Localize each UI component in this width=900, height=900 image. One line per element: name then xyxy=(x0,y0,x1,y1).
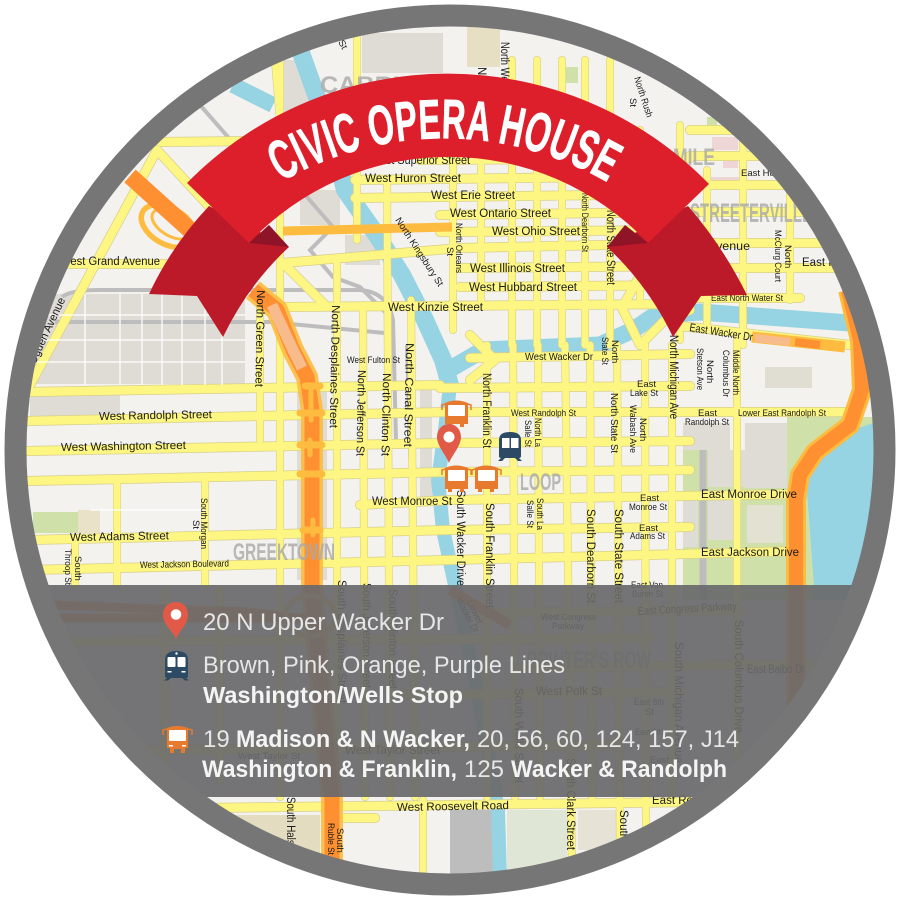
map: street labels: South xyxy=(334,828,345,853)
address line: 20 N Upper Wacker Dr xyxy=(203,609,444,636)
map: street labels: South Wells Street xyxy=(512,688,524,784)
map: street labels: West Randolph St xyxy=(511,408,576,419)
map: street labels: East Balbo Dr xyxy=(747,664,805,676)
map: street labels: St xyxy=(335,38,349,52)
map: street labels: North Jefferson St xyxy=(353,370,367,457)
map: street labels: West Huron Street xyxy=(365,173,462,185)
map: street labels: State St xyxy=(599,337,610,365)
map: street labels: North State Street xyxy=(604,210,616,286)
map: street labels: Adams St xyxy=(630,531,665,542)
map: street labels: East xyxy=(698,408,717,419)
map: street labels: North State St xyxy=(608,393,620,453)
map: street labels: West Congress xyxy=(541,612,596,623)
map: street labels: East Congress Parkway xyxy=(638,601,737,618)
map: street labels: West Randolph Street xyxy=(99,409,213,423)
icon: bus xyxy=(163,726,192,753)
banner: left tail xyxy=(149,206,289,337)
map: street labels: Parkway xyxy=(552,621,584,632)
map: street labels: Lower xyxy=(463,598,485,626)
map: street labels: St xyxy=(627,98,638,107)
map marker: bus stop north xyxy=(442,400,471,427)
map marker: train station xyxy=(498,432,522,461)
bus routes line two: Washington & Franklin, xyxy=(202,756,457,783)
map: street labels: West Ohio Street xyxy=(492,226,581,238)
map: neighborhood names: LOOP xyxy=(520,469,561,496)
map: street labels: North Wells St xyxy=(498,42,510,103)
map: street labels: South Desplaines Street xyxy=(335,580,347,704)
map: river xyxy=(233,50,880,880)
train stop text: Washington/Wells Stop xyxy=(203,682,463,708)
map: street labels: West Superior Street xyxy=(370,155,471,167)
banner: title xyxy=(281,138,612,185)
map: street labels: South xyxy=(72,556,83,581)
map: street labels: North Green Street xyxy=(252,290,266,388)
map: rail lines xyxy=(55,105,703,600)
map: street labels: East xyxy=(640,493,659,504)
map: street labels: West Wacker Dr xyxy=(525,351,593,363)
banner: right fold xyxy=(607,225,648,247)
info panel background xyxy=(48,585,852,797)
map: street labels: West Jackson Boulevard xyxy=(140,558,229,571)
banner: CIVIC OPERA HOUSE xyxy=(268,99,624,182)
train lines text: Brown, Pink, Orange, Purple Lines xyxy=(203,652,565,679)
map: gray building blocks xyxy=(30,33,443,580)
map marker: bus stop southeast xyxy=(472,466,501,492)
map: street labels: Randolph St xyxy=(685,417,729,428)
map: street labels: East Jackson Drive xyxy=(701,547,799,559)
map: expressways xyxy=(50,176,862,870)
map: street labels: Salle St xyxy=(522,420,533,447)
map: street labels: North Franklin St xyxy=(480,373,492,449)
map: street labels: East North Water St xyxy=(711,293,783,304)
map: street labels: Salle St xyxy=(524,500,535,528)
bus routes line one: Madison & N Wacker, xyxy=(236,726,470,753)
map: street labels: South Wacker Drive xyxy=(454,490,466,586)
map: street labels: South Clinton Street xyxy=(386,589,398,690)
map: street labels: North Clinton St xyxy=(379,373,392,457)
map: street labels: East Illinois xyxy=(802,257,860,269)
map: street labels: North Michigan Ave xyxy=(667,335,679,419)
map: street labels: Columbus Dr xyxy=(720,350,731,397)
bus routes line one: 19 xyxy=(203,726,230,753)
map: street labels: Throop St xyxy=(62,549,73,585)
map: street labels: North Rush xyxy=(631,76,655,119)
map: street labels: North Kingsbury St xyxy=(392,216,445,289)
map: street labels: South xyxy=(617,810,629,840)
map: neighborhood names: CABRINI xyxy=(320,72,425,99)
map: street labels: West Polk St xyxy=(536,686,603,698)
map: street labels: East Roosevelt Road xyxy=(652,795,760,807)
map: street labels: West Grand Avenue xyxy=(60,256,160,268)
icon: location pin xyxy=(163,602,188,639)
map: street labels: West Illinois Street xyxy=(470,263,566,275)
map: street labels: North Clark xyxy=(475,67,487,125)
map: street labels: East Huron St xyxy=(741,168,800,179)
map: street labels: Middle North xyxy=(730,350,741,395)
map: street labels: Ruble St xyxy=(325,823,336,855)
banner: main ribbon xyxy=(187,74,709,243)
map: street labels: West Monroe St xyxy=(372,496,453,508)
map: street labels: Lake St xyxy=(630,388,658,399)
map: street labels: East xyxy=(650,755,669,766)
map: street labels: West Hubbard Street xyxy=(469,282,578,294)
map marker: venue pin xyxy=(437,424,461,463)
map: street labels: North Canal Street xyxy=(401,343,415,448)
map: street labels: Monroe St xyxy=(629,502,667,513)
map: street labels: East Wacker Dr xyxy=(689,322,754,344)
map: street labels: Lower East Randolph St xyxy=(738,408,826,419)
map: street labels: West Ontario Street xyxy=(450,208,552,220)
map: neighborhood names: GREEKTOWN xyxy=(233,539,335,566)
map: street labels: South Dearborn St xyxy=(584,509,596,604)
map marker: bus stop southwest xyxy=(442,466,471,492)
map: street labels: East xyxy=(637,379,656,390)
banner: right tail xyxy=(607,206,747,337)
map: street labels: East 8th xyxy=(634,697,664,708)
map: street labels: East 9th xyxy=(635,727,663,738)
map: street labels: Avenue xyxy=(708,241,750,253)
map: street labels: South Jefferson Street xyxy=(360,583,372,689)
map: street labels: South La xyxy=(534,498,545,531)
map: street labels: North xyxy=(637,418,648,441)
map: street labels: West Adams Street xyxy=(70,530,170,544)
map: street labels: South Clark Street xyxy=(564,758,576,851)
map: street labels: Stetson Ave xyxy=(694,348,705,390)
icon: train xyxy=(164,651,189,680)
map: street labels: East xyxy=(639,523,658,534)
map: street labels: North Dearborn St xyxy=(579,193,590,252)
map: street labels: West Fulton St xyxy=(347,355,400,366)
map: street labels: West Kinzie Street xyxy=(388,302,484,314)
map: street labels: McClurg Court xyxy=(772,230,783,282)
map: street labels: South Halsted Street xyxy=(284,797,296,888)
map: neighborhood names: MILE xyxy=(673,144,715,171)
map: street labels: West Erie Street xyxy=(431,190,516,202)
info panel content xyxy=(163,602,739,783)
map: street labels: East Van xyxy=(631,580,663,591)
map: neighborhood names: PRINTER'S ROW xyxy=(527,647,651,674)
map: street labels: West Taylor Street xyxy=(345,745,441,757)
bus routes line one: 20, 56, 60, 124, 157, J14 xyxy=(477,726,739,753)
map: street labels: Wacker Dr xyxy=(453,596,481,635)
map: street labels: East Monroe Drive xyxy=(701,489,797,501)
map: street labels: West Washington Street xyxy=(61,440,187,454)
map: street labels: West Taylor St xyxy=(238,751,300,762)
map: street labels: South State Street xyxy=(612,509,624,604)
map: street labels: St xyxy=(645,707,654,718)
map: street labels: Buren St xyxy=(632,589,663,600)
map: street labels: Ogden Avenue xyxy=(27,296,68,366)
map: street labels: Wabash Ave xyxy=(627,405,638,453)
map: neighborhood names xyxy=(233,72,812,674)
map: street labels: St xyxy=(190,520,201,529)
map: street labels: North xyxy=(782,245,793,268)
banner: left fold xyxy=(249,225,289,247)
map: street labels: North xyxy=(609,340,620,363)
map: street labels: North Orleans xyxy=(453,223,464,273)
map: street labels: St xyxy=(444,247,455,256)
bus routes line two: Wacker & Randolph xyxy=(511,756,727,783)
map: street labels: North La xyxy=(532,418,543,448)
banner xyxy=(149,74,747,337)
map: street labels: North xyxy=(704,360,715,383)
map: street labels: West Roosevelt Road xyxy=(397,800,509,814)
map: white minor streets xyxy=(30,294,245,510)
map: street labels: South Morgan xyxy=(198,498,209,549)
map: street labels: North Desplaines Street xyxy=(327,305,341,429)
map: street labels: South Columbus Drive xyxy=(732,620,744,733)
bus routes line two: 125 xyxy=(464,756,504,783)
map: lake xyxy=(807,423,874,585)
map: street labels: South Franklin Street xyxy=(483,503,495,609)
map: street labels: South Michigan Avenue xyxy=(672,642,684,763)
